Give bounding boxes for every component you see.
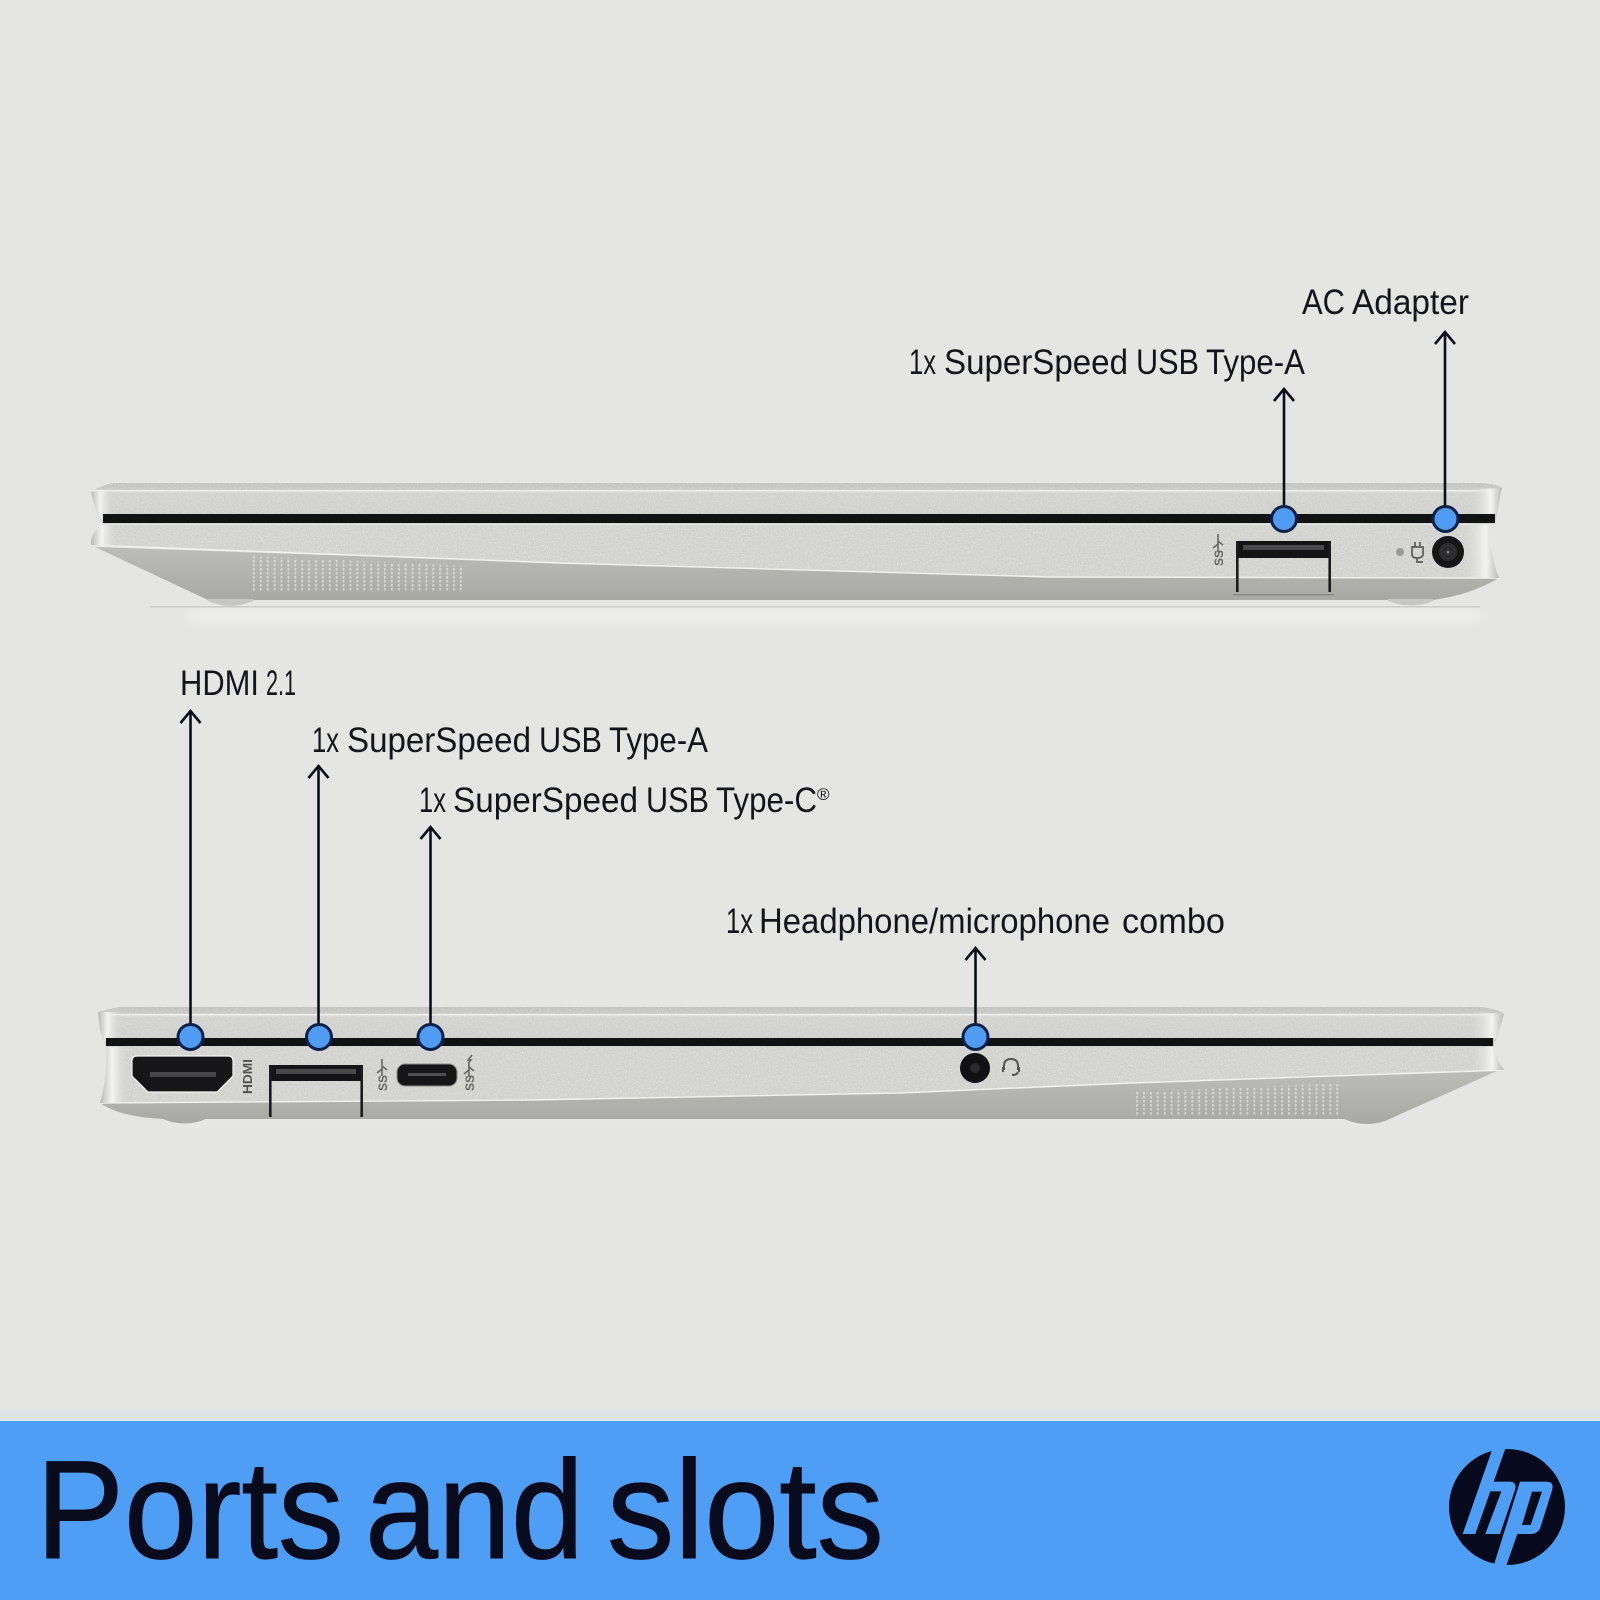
icon: USB SS — [1212, 534, 1226, 566]
USB-A port — [1233, 541, 1334, 596]
callout: right USB Type-A: Type-A — [1206, 343, 1306, 382]
callout: right USB Type-A: USB — [1136, 343, 1199, 382]
callout: USB Type-C: 1x — [419, 781, 446, 820]
speaker grille — [1131, 1083, 1344, 1116]
callout: headphone combo: combo — [1122, 902, 1225, 941]
floor reflection — [170, 1121, 1370, 1126]
callout: headphone combo: 1x — [726, 902, 753, 941]
DC jack — [1432, 536, 1464, 568]
callout: left USB Type-A: SuperSpeed — [347, 721, 531, 760]
callout: headphone combo — [726, 902, 1225, 1050]
icon: HP logo — [1449, 1449, 1565, 1567]
callout: AC Adapter: AC — [1302, 283, 1345, 322]
callout: AC Adapter — [1302, 283, 1469, 532]
laptop: left side view — [98, 1007, 1504, 1126]
HDMI port — [132, 1056, 233, 1092]
laptop: right side view — [90, 483, 1502, 608]
base lower wedge — [95, 547, 1499, 600]
base lower wedge — [100, 1071, 1497, 1124]
callout: USB Type-C: Type-C — [716, 781, 817, 820]
title: slots — [607, 1431, 884, 1588]
callout: left USB Type-A: USB — [539, 721, 602, 760]
callout: AC Adapter: Adapter — [1352, 283, 1469, 322]
callout: USB Type-C — [418, 781, 830, 1050]
light strip above banner — [0, 1410, 1600, 1421]
base upper — [91, 525, 1499, 578]
callout: USB Type-C: USB — [646, 781, 709, 820]
icon: USB SS — [376, 1059, 390, 1091]
banner — [0, 1421, 1600, 1600]
callout: left USB Type-A: 1x — [312, 721, 339, 760]
icon: USB SS with bolt: SS — [463, 1075, 477, 1091]
callout: right USB Type-A: SuperSpeed — [944, 343, 1128, 382]
callout: right USB Type-A — [909, 343, 1306, 532]
floor reflection — [190, 610, 1480, 622]
rubber feet — [208, 600, 1433, 605]
headphone jack — [960, 1053, 990, 1083]
base upper — [100, 1047, 1504, 1103]
title: Ports — [36, 1431, 344, 1588]
callout: right USB Type-A: 1x — [909, 343, 936, 382]
USB-A port — [269, 1065, 363, 1117]
hinge gap — [103, 514, 1495, 523]
icon: USB SS: SS — [1212, 550, 1226, 566]
callout: left USB Type-A: Type-A — [609, 721, 709, 760]
title: and — [365, 1431, 584, 1588]
icon: USB SS: SS — [376, 1075, 390, 1091]
speaker grille — [253, 556, 467, 593]
icon: power LED and plug — [1396, 542, 1423, 562]
callout: HDMI 2.1: HDMI — [180, 664, 259, 703]
callout: HDMI 2.1: 2.1 — [266, 664, 296, 703]
hinge gap — [106, 1038, 1493, 1046]
callout: USB Type-C: ® — [817, 785, 830, 804]
lid — [98, 1007, 1504, 1047]
USB-C port — [397, 1064, 457, 1086]
icon: HDMI label: HDMI — [241, 1059, 255, 1094]
callout: left USB Type-A — [306, 721, 709, 1050]
icon: headset — [1003, 1059, 1019, 1075]
icon: USB SS with bolt — [463, 1055, 477, 1091]
callout: headphone combo: Headphone/microphone — [759, 902, 1110, 941]
lid — [91, 483, 1502, 524]
callout: HDMI 2.1 — [178, 664, 296, 1050]
callout: USB Type-C: SuperSpeed — [453, 781, 638, 820]
